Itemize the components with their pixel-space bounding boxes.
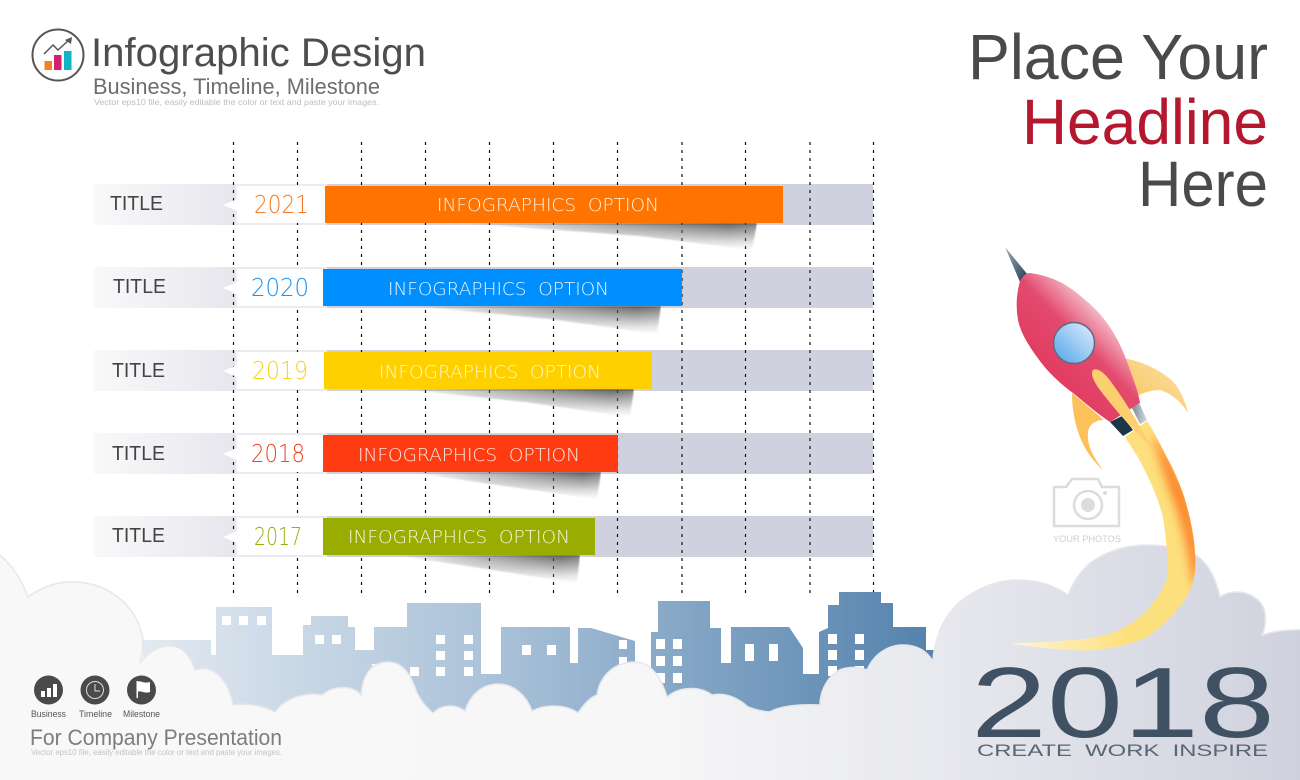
- logo icon: growth chart: [32, 30, 84, 80]
- row 2018: 2018: [251, 439, 305, 468]
- row 2019: TITLE: [112, 360, 165, 382]
- text block: for company presentation: Vector eps10 file, easily editable the color or text and paste your images.: [31, 748, 282, 757]
- headline: place your headline here: [968, 21, 1268, 220]
- year badge: 2018: 2018: [971, 647, 1275, 759]
- row 2019: 2019: [252, 356, 308, 385]
- row 2020: [113, 269, 682, 334]
- icon: business: [31, 676, 66, 719]
- icon: timeline: [79, 676, 112, 719]
- row 2021: [110, 186, 783, 250]
- photo placeholder: your photos: [1053, 479, 1121, 544]
- timeline bands: [94, 184, 873, 557]
- icon: timeline: Timeline: [79, 709, 112, 719]
- row 2017: 2017: [254, 522, 302, 551]
- row 2020: TITLE: [113, 276, 166, 298]
- cloud layer: [0, 545, 1300, 780]
- row 2017: INFOGRAPHICS OPTION: [348, 527, 570, 548]
- row 2020: INFOGRAPHICS OPTION: [388, 279, 609, 300]
- heading: infographic design: [91, 31, 426, 107]
- row 2019: INFOGRAPHICS OPTION: [379, 362, 601, 383]
- headline: place your headline here: Place Your: [968, 21, 1268, 93]
- city skyline: [143, 592, 936, 725]
- row 2017: [112, 518, 595, 583]
- row 2020: 2020: [251, 273, 309, 302]
- heading: infographic design: Vector eps10 file, easily editable the color or text and paste your images.: [94, 97, 379, 107]
- icon: business: Business: [31, 709, 66, 719]
- text block: for company presentation: For Company Presentation: [30, 725, 282, 750]
- headline: place your headline here: Headline: [1022, 86, 1268, 158]
- rocket: [1005, 247, 1188, 470]
- row 2017: TITLE: [112, 525, 165, 547]
- row 2018: TITLE: [112, 443, 165, 465]
- row 2021: INFOGRAPHICS OPTION: [437, 195, 659, 216]
- row 2018: INFOGRAPHICS OPTION: [358, 445, 580, 466]
- row 2021: TITLE: [110, 193, 163, 215]
- year badge: 2018: CREATE WORK INSPIRE: [977, 741, 1268, 760]
- photo placeholder: your photos: YOUR PHOTOS: [1053, 534, 1121, 544]
- row 2018: [112, 435, 618, 499]
- icon: milestone: [123, 676, 160, 719]
- dashed time grid: [234, 142, 874, 595]
- row 2021: 2021: [254, 190, 309, 219]
- heading: infographic design: Infographic Design: [91, 31, 426, 75]
- icon: milestone: Milestone: [123, 709, 160, 719]
- headline: place your headline here: Here: [1138, 148, 1268, 220]
- row 2019: [112, 352, 652, 417]
- rocket flame: [1011, 421, 1196, 651]
- heading: infographic design: Business, Timeline, Milestone: [93, 74, 380, 99]
